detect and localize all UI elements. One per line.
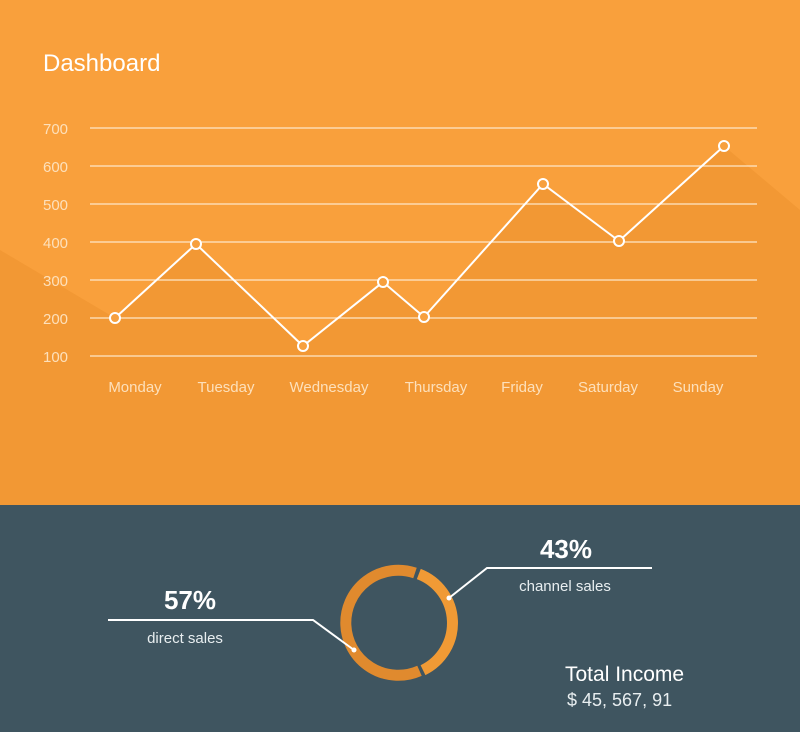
x axis labels: Tuesday xyxy=(198,379,255,396)
y axis labels and grid: 100 xyxy=(43,349,68,366)
callout: direct sales xyxy=(108,585,356,652)
callout: channel sales xyxy=(446,534,652,600)
x axis labels: Friday xyxy=(501,379,543,396)
y axis labels and grid: 200 xyxy=(43,311,68,328)
x axis labels: Monday xyxy=(108,379,162,396)
y axis labels and grid: 500 xyxy=(43,197,68,214)
y axis labels and grid: 700 xyxy=(43,121,68,138)
donut chart xyxy=(346,570,452,675)
orange panel xyxy=(0,0,800,505)
y axis labels and grid: 600 xyxy=(43,159,68,176)
callout: direct sales: direct sales xyxy=(147,630,223,647)
x axis labels: Thursday xyxy=(405,379,468,396)
total income: $ 45, 567, 91 xyxy=(567,690,672,710)
y axis labels and grid xyxy=(43,121,68,366)
total income xyxy=(565,663,684,710)
x axis labels: Sunday xyxy=(673,379,724,396)
callout: channel sales: channel sales xyxy=(519,578,611,595)
title: Dashboard xyxy=(43,50,160,77)
dark panel xyxy=(0,505,800,732)
callout: channel sales: 43% xyxy=(540,534,592,564)
long shadow under line xyxy=(0,146,800,505)
x axis labels xyxy=(108,379,724,396)
total income: Total Income xyxy=(565,663,684,686)
line chart xyxy=(110,141,729,351)
x axis labels: Saturday xyxy=(578,379,639,396)
y axis labels and grid: 300 xyxy=(43,273,68,290)
y axis labels and grid: 400 xyxy=(43,235,68,252)
callout: direct sales: 57% xyxy=(164,585,216,615)
x axis labels: Wednesday xyxy=(290,379,369,396)
